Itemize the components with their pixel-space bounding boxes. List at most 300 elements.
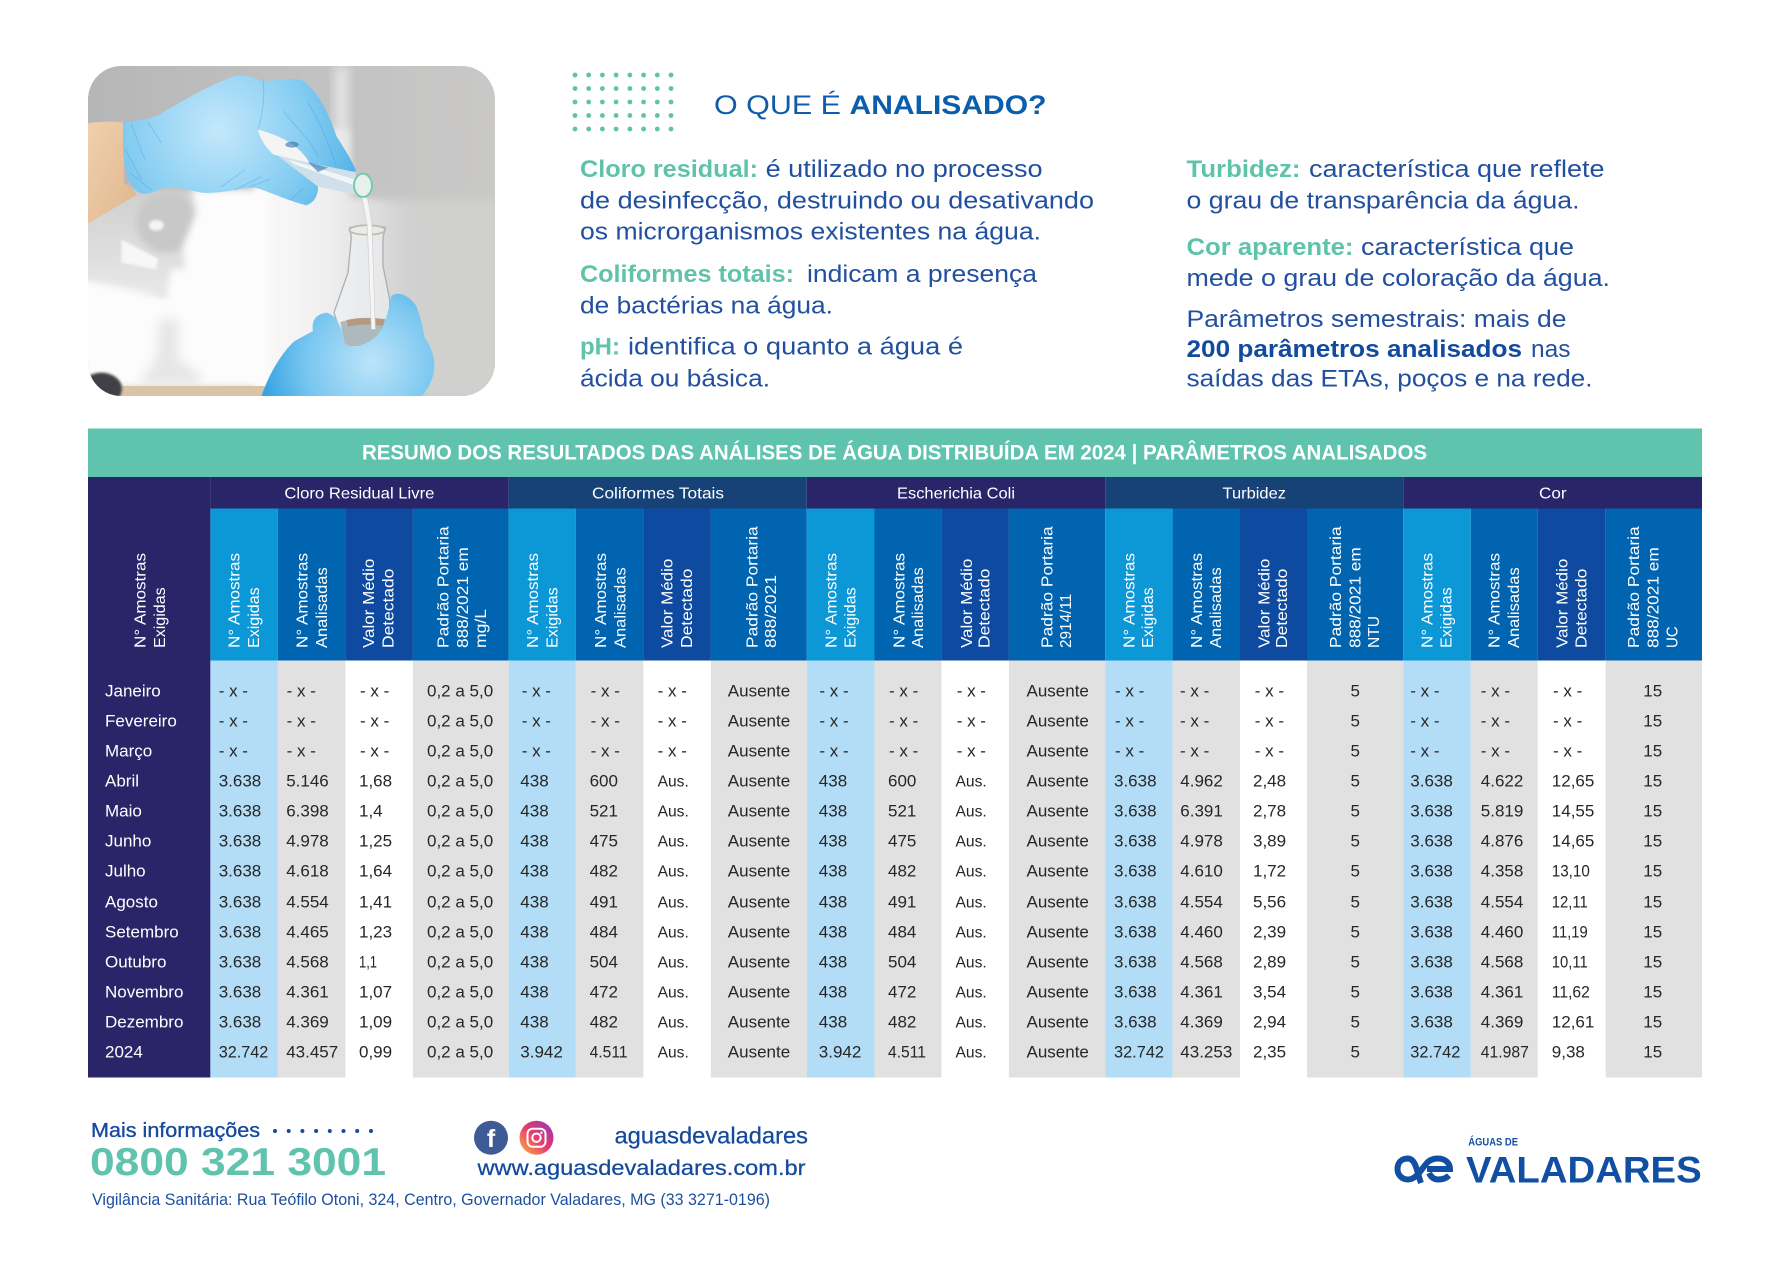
row: Julho: 438	[819, 862, 847, 880]
row: Março: - x -	[591, 742, 620, 760]
row: Outubro: 10,11	[1552, 952, 1588, 972]
group header: Turbidez	[1105, 477, 1403, 508]
column headers: Cloro Residual Livre: N° Amostras	[227, 553, 244, 648]
row: Fevereiro: - x -	[219, 712, 248, 730]
row: Outubro: 3.638	[1114, 952, 1157, 972]
row: Dezembro	[219, 1012, 1662, 1032]
row: Maio: 6.391	[1180, 802, 1223, 820]
row: Janeiro: Ausente	[728, 682, 790, 700]
month labels: Novembro	[105, 982, 183, 1002]
row: Março	[219, 742, 1662, 760]
row: Agosto: 15	[1643, 892, 1662, 912]
row: Fevereiro: - x -	[1255, 712, 1284, 730]
column headers: Cor: N° Amostras	[1486, 553, 1504, 648]
row: Fevereiro: - x -	[889, 712, 918, 730]
row: Julho: 13,10	[1552, 862, 1590, 880]
row: Maio: 3.638	[1114, 802, 1157, 820]
row: Agosto: Aus.	[658, 894, 689, 912]
row: 2024 totals: Aus.	[956, 1044, 987, 1062]
table heading band: RESUMO DOS RESULTADOS DAS ANÁLISES DE ÁGUA DISTRIBUÍDA EM 2024 | PARÂMETROS ANALISADOS	[362, 440, 1427, 464]
row: Maio: Ausente	[728, 802, 790, 820]
row: Março: - x -	[957, 742, 986, 760]
photo: gloved hands pouring liquid into a flask	[78, 66, 501, 405]
row: Junho: 4.876	[1481, 832, 1523, 850]
row: Agosto: 5	[1350, 892, 1360, 912]
column headers: Cloro Residual Livre: 888/2021 em	[455, 547, 472, 648]
row: Outubro: 4.568	[1180, 952, 1223, 972]
row: Julho: 438	[520, 862, 549, 880]
row: Novembro: 0,2 a 5,0	[427, 982, 493, 1002]
row: Novembro: Ausente	[728, 982, 790, 1002]
text block: right definitions: característica que reflete	[1309, 156, 1604, 183]
row: 2024 totals: 2,35	[1253, 1042, 1286, 1062]
glove creases	[125, 81, 336, 199]
row: Dezembro: 15	[1643, 1012, 1662, 1032]
row: Fevereiro: - x -	[1410, 712, 1440, 730]
row: Novembro: Ausente	[1026, 982, 1089, 1002]
month labels: Maio	[105, 802, 142, 820]
row: Agosto: 5,56	[1253, 892, 1286, 912]
row: Janeiro: - x -	[591, 682, 620, 700]
row: Fevereiro: - x -	[591, 712, 620, 730]
column headers: Escherichia Coli: N° Amostras	[823, 553, 840, 648]
row: Março: - x -	[1481, 742, 1510, 760]
icon: instagram	[520, 1121, 554, 1155]
row: Maio: Aus.	[658, 804, 689, 820]
row: Agosto: 491	[590, 892, 618, 912]
column headers: Cor: 888/2021 em	[1646, 547, 1662, 648]
row: Dezembro: 3.638	[1410, 1012, 1453, 1032]
column headers: Escherichia Coli: N° Amostras	[891, 553, 908, 648]
row: Julho: 1,72	[1253, 862, 1286, 880]
row: 2024 totals: 4.511	[888, 1042, 926, 1062]
table column backgrounds	[210, 660, 1702, 1078]
row: Julho: 5	[1350, 862, 1360, 880]
row: Março: - x -	[658, 742, 687, 760]
row: Março: 5	[1350, 742, 1360, 760]
row: Maio: Aus.	[956, 804, 987, 820]
title: ANALISADO?	[850, 90, 1046, 120]
column headers: Escherichia Coli: 2914/11	[1058, 594, 1075, 648]
row: Novembro: 472	[590, 982, 618, 1002]
row: Junho: 1,25	[359, 832, 392, 850]
row: Junho: 3,89	[1253, 832, 1286, 850]
row: Abril: 5.146	[286, 772, 329, 790]
row: Março: 15	[1643, 742, 1662, 760]
row: Abril: 5	[1350, 772, 1360, 790]
column headers: Escherichia Coli: Detectado	[976, 569, 994, 648]
first column: months sidebar: N° Amostras	[132, 553, 150, 648]
row: Outubro: 15	[1643, 952, 1662, 972]
row: Janeiro: - x -	[1115, 682, 1144, 700]
text block: right definitions: o grau de transparência da água.	[1186, 188, 1580, 214]
row: Outubro: 3.638	[1410, 952, 1453, 972]
row: Outubro: 2,89	[1253, 952, 1286, 972]
row: Janeiro: 0,2 a 5,0	[427, 682, 493, 700]
column headers: Turbidez: Padrão Portaria	[1328, 526, 1345, 648]
row: 2024 totals: 41.987	[1481, 1042, 1529, 1062]
row: Agosto: 438	[520, 892, 549, 912]
row: Dezembro: Ausente	[1026, 1012, 1089, 1032]
row: Agosto: 491	[888, 892, 916, 912]
row: Janeiro	[219, 682, 1662, 700]
column headers: Cor: Analisadas	[1506, 567, 1523, 648]
row: Abril: 2,48	[1253, 772, 1286, 790]
row: Janeiro: - x -	[1255, 682, 1284, 700]
row: 2024 totals: 32.742	[1114, 1042, 1164, 1062]
row: Abril: 600	[888, 772, 916, 790]
row: Janeiro: - x -	[1481, 682, 1510, 700]
row: Setembro	[219, 922, 1662, 942]
arm	[88, 121, 137, 223]
row: Fevereiro: - x -	[1180, 712, 1209, 730]
column headers: Cloro Residual Livre	[210, 508, 509, 660]
row: Setembro: 3.638	[1410, 922, 1453, 942]
row: Julho: 0,2 a 5,0	[427, 862, 493, 880]
row: Maio: 3.638	[219, 802, 261, 820]
row: Janeiro: 5	[1350, 682, 1360, 700]
row: Dezembro: Ausente	[728, 1012, 790, 1032]
column headers: Turbidez: Exigidas	[1140, 587, 1157, 648]
row: Outubro	[219, 952, 1662, 972]
logo: Águas de Valadares: VALADARES	[1466, 1149, 1702, 1190]
row: Dezembro: 482	[590, 1012, 618, 1032]
text block: right definitions	[1186, 156, 1610, 392]
row: Novembro: 438	[520, 982, 549, 1002]
column headers: Escherichia Coli: Valor Médio	[959, 559, 976, 648]
row: Setembro: 15	[1643, 922, 1662, 942]
logo: Águas de Valadares: ÁGUAS DE	[1468, 1136, 1518, 1148]
row: Maio: 14,55	[1552, 802, 1594, 820]
row: Julho: 3.638	[219, 862, 261, 880]
row: Julho	[219, 862, 1662, 880]
lower glove	[261, 294, 434, 397]
row: Outubro: 0,2 a 5,0	[427, 952, 493, 972]
row: Março: Ausente	[728, 742, 790, 760]
row: Outubro: 438	[819, 952, 847, 972]
row: Outubro: 504	[888, 952, 916, 972]
row: Setembro: 5	[1350, 922, 1360, 942]
title: O QUE É	[714, 90, 841, 120]
row: Julho: 4.618	[286, 862, 329, 880]
row: Outubro: 4.568	[286, 952, 329, 972]
row: Setembro: 484	[590, 922, 618, 942]
row: Janeiro: - x -	[658, 682, 687, 700]
row: Novembro: 4.361	[286, 982, 329, 1002]
decorative dot grid	[573, 73, 673, 131]
row: Dezembro: 3.638	[219, 1012, 261, 1032]
row: 2024 totals: 3.942	[520, 1042, 563, 1062]
row: Novembro: 5	[1350, 982, 1360, 1002]
test tube	[278, 156, 356, 195]
row: 2024 totals: 0,2 a 5,0	[427, 1042, 493, 1062]
row: Agosto: Ausente	[728, 892, 790, 912]
row: Novembro: 15	[1643, 982, 1662, 1002]
row: Janeiro: - x -	[889, 682, 918, 700]
row: Dezembro: Aus.	[956, 1014, 987, 1032]
row: Dezembro: 2,94	[1253, 1012, 1286, 1032]
row: Julho: 482	[888, 862, 916, 880]
column headers: Cloro Residual Livre: Valor Médio	[361, 559, 378, 648]
column headers: Cloro Residual Livre: Padrão Portaria	[436, 526, 452, 648]
month labels: Fevereiro	[105, 712, 177, 730]
row: Novembro: 4.361	[1180, 982, 1223, 1002]
row: Agosto: 12,11	[1552, 892, 1588, 912]
row: Janeiro: Ausente	[1026, 682, 1089, 700]
row: Dezembro: 4.369	[1481, 1012, 1523, 1032]
text block: left definitions: Coliformes totais:	[580, 261, 794, 288]
first column: months sidebar: Exigidas	[152, 587, 169, 648]
month labels: Setembro	[105, 922, 179, 942]
row: Maio: 5	[1350, 802, 1360, 820]
row: Fevereiro: 0,2 a 5,0	[427, 712, 493, 730]
first column: months sidebar	[88, 477, 210, 1078]
text block: right definitions: Cor aparente:	[1186, 234, 1354, 261]
title	[714, 90, 1046, 120]
text block: right definitions: característica que	[1361, 234, 1574, 261]
column headers: Escherichia Coli	[807, 508, 1105, 660]
column headers: Turbidez: N° Amostras	[1121, 553, 1138, 648]
month labels: Abril	[105, 772, 139, 790]
row: Fevereiro	[219, 712, 1662, 730]
row: 2024 totals: Aus.	[658, 1044, 689, 1062]
row: Outubro: 4.568	[1481, 952, 1523, 972]
row: Abril: 12,65	[1552, 772, 1594, 790]
row: 2024 totals: Ausente	[1026, 1042, 1089, 1062]
month labels: Outubro	[105, 952, 166, 972]
group header: Cloro Residual Livre	[210, 477, 509, 508]
row: Agosto: 3.638	[219, 892, 261, 912]
row: Abril: 0,2 a 5,0	[427, 772, 493, 790]
row: Janeiro: - x -	[819, 682, 849, 700]
row: Agosto: 4.554	[1180, 892, 1223, 912]
row: Junho: 4.978	[286, 832, 329, 850]
row: Abril: 600	[590, 772, 618, 790]
row: Agosto: 3.638	[1114, 892, 1157, 912]
stream	[362, 198, 375, 329]
column headers: Cor: Valor Médio	[1554, 559, 1572, 648]
row: Junho: 438	[520, 832, 549, 850]
column headers: Cor: Padrão Portaria	[1626, 526, 1643, 648]
row: Setembro: 2,39	[1253, 922, 1286, 942]
row: Abril: Aus.	[658, 774, 689, 790]
row: Agosto: 3.638	[1410, 892, 1453, 912]
row: Junho: 15	[1643, 832, 1662, 850]
row: Abril: 1,68	[359, 772, 392, 790]
column headers: Escherichia Coli: Padrão Portaria	[1039, 526, 1056, 648]
month labels: Janeiro	[105, 682, 161, 700]
row: Outubro: 504	[590, 952, 618, 972]
row: Junho: 4.978	[1180, 832, 1223, 850]
row: Agosto: 1,41	[359, 892, 392, 912]
column headers: Turbidez: Valor Médio	[1256, 559, 1273, 648]
column headers: Turbidez: Analisadas	[1208, 567, 1225, 648]
row: Outubro: 438	[520, 952, 549, 972]
row: Março: - x -	[360, 742, 389, 760]
row: Setembro: 11,19	[1552, 922, 1588, 942]
column headers: Cor: N° Amostras	[1420, 553, 1437, 648]
address line: Vigilância Sanitária: Rua Teófilo Otoni, 324, Centro, Governador Valadares, MG (33 3271-0196)	[92, 1191, 770, 1209]
text block: left definitions: de bactérias na água.	[580, 292, 833, 320]
month labels: Junho	[105, 832, 151, 850]
row: Outubro: 1,1	[359, 952, 377, 972]
text block: left definitions	[580, 156, 1094, 392]
row: Novembro: 4.361	[1481, 982, 1523, 1002]
row: Agosto: 4.554	[1481, 892, 1523, 912]
row: Setembro: 4.460	[1481, 922, 1523, 942]
month labels	[105, 682, 183, 1062]
row: Julho: 4.610	[1180, 862, 1223, 880]
text block: right definitions: nas	[1531, 336, 1570, 363]
column headers: Cor: Exigidas	[1438, 587, 1455, 648]
column headers: Cor: UC	[1664, 626, 1681, 648]
row: Março: - x -	[287, 742, 316, 760]
month labels: Março	[105, 742, 152, 760]
row: Julho: 1,64	[359, 862, 392, 880]
row: Junho: 3.638	[219, 832, 261, 850]
row: Dezembro: 3.638	[1114, 1012, 1157, 1032]
column headers: Escherichia Coli: Exigidas	[843, 587, 860, 648]
row: Setembro: 3.638	[1114, 922, 1157, 942]
text block: left definitions: os microrganismos existentes na água.	[580, 218, 1041, 246]
text block: right definitions: Parâmetros semestrais: mais de	[1186, 306, 1566, 333]
row: Junho: 3.638	[1410, 832, 1453, 850]
row: Julho: 482	[590, 862, 618, 880]
footer: more information: Mais informações	[91, 1119, 260, 1142]
row: 2024 totals: 43.457	[286, 1042, 338, 1062]
row: Abril: Ausente	[1026, 772, 1089, 790]
row: Junho: Aus.	[956, 834, 987, 850]
row: Maio: 521	[590, 802, 618, 820]
row: Maio: 3.638	[1410, 802, 1453, 820]
row: Junho: 3.638	[1114, 832, 1157, 850]
row: Abril: 438	[520, 772, 549, 790]
row: Dezembro: 12,61	[1552, 1012, 1594, 1032]
row: Janeiro: - x -	[1410, 682, 1440, 700]
row: Julho: Ausente	[1026, 862, 1089, 880]
row: Abril: 3.638	[1114, 772, 1157, 790]
column headers: Coliformes Totais: Analisadas	[612, 567, 629, 648]
row: Julho: 3.638	[1410, 862, 1453, 880]
row: Setembro: 0,2 a 5,0	[427, 922, 493, 942]
row: Setembro: 438	[819, 922, 847, 942]
row: Setembro: 1,23	[359, 922, 392, 942]
column headers: Turbidez	[1105, 508, 1403, 660]
row: Março: - x -	[1115, 742, 1144, 760]
row: Dezembro: 482	[888, 1012, 916, 1032]
row: Agosto: 438	[819, 892, 847, 912]
row: Junho: Aus.	[658, 834, 689, 850]
row: Outubro: Ausente	[1026, 952, 1089, 972]
row: Agosto: 4.554	[286, 892, 329, 912]
row: Janeiro: - x -	[287, 682, 316, 700]
row: Dezembro: 4.369	[1180, 1012, 1223, 1032]
column headers: Coliformes Totais: Detectado	[679, 569, 696, 648]
column headers: Coliformes Totais: Padrão Portaria	[744, 526, 762, 648]
column headers: Coliformes Totais: Exigidas	[544, 587, 561, 648]
text block: left definitions: Cloro residual:	[580, 156, 758, 183]
row: Novembro: 438	[819, 982, 847, 1002]
row: Março: Ausente	[1026, 742, 1089, 760]
row: Julho: 3.638	[1114, 862, 1157, 880]
logo: Águas de Valadares	[1398, 1136, 1702, 1190]
row: Novembro: 1,07	[359, 982, 392, 1002]
text block: left definitions: de desinfecção, destruindo ou desativando	[580, 188, 1094, 214]
row: Fevereiro: Ausente	[1026, 712, 1089, 730]
row: Julho: Aus.	[956, 864, 987, 880]
row: Maio: 521	[888, 802, 916, 820]
row: Novembro: 3.638	[1114, 982, 1157, 1002]
row: Julho: Aus.	[658, 864, 689, 880]
row: Fevereiro: - x -	[658, 712, 687, 730]
row: 2024 totals: Ausente	[728, 1042, 790, 1062]
row: Março: - x -	[219, 742, 248, 760]
row: Janeiro: 15	[1643, 682, 1662, 700]
column headers: Cloro Residual Livre: Analisadas	[314, 567, 331, 648]
row: Junho: 5	[1350, 832, 1360, 850]
row: Abril: 4.962	[1180, 772, 1223, 790]
row: 2024 totals: 9,38	[1552, 1042, 1585, 1062]
month labels: Dezembro	[105, 1012, 183, 1032]
row: 2024 totals: 0,99	[359, 1042, 392, 1062]
row: Abril: Aus.	[956, 774, 987, 790]
row: Junho: 475	[888, 832, 916, 850]
upper glove	[123, 76, 356, 205]
row: Fevereiro: - x -	[522, 712, 551, 730]
social handle: aguasdevaladares	[614, 1122, 808, 1148]
row: Novembro	[219, 982, 1662, 1002]
column headers: Cor	[1403, 508, 1702, 660]
text block: left definitions: é utilizado no processo	[766, 156, 1043, 183]
phone number: 0800 321 3001	[90, 1141, 386, 1184]
row: Julho: 4.358	[1481, 862, 1523, 880]
row: Dezembro: 4.369	[286, 1012, 329, 1032]
row: Julho: Ausente	[728, 862, 790, 880]
row: Setembro: 4.460	[1180, 922, 1223, 942]
row: Agosto: 0,2 a 5,0	[427, 892, 493, 912]
row: Novembro: 3,54	[1253, 982, 1286, 1002]
row: Dezembro: 1,09	[359, 1012, 392, 1032]
text block: left definitions: pH:	[580, 334, 620, 360]
row: Junho: Ausente	[728, 832, 790, 850]
row: Setembro: 4.465	[286, 922, 329, 942]
row: Outubro: Ausente	[728, 952, 790, 972]
row: Junho: Ausente	[1026, 832, 1089, 850]
row: Setembro: 438	[520, 922, 549, 942]
icon: facebook: f	[487, 1125, 496, 1153]
row: Maio: Ausente	[1026, 802, 1089, 820]
column headers: Coliformes Totais: Valor Médio	[660, 559, 677, 648]
column headers: Cor: Detectado	[1573, 569, 1590, 648]
row: Outubro: Aus.	[956, 954, 987, 972]
column headers: Cloro Residual Livre: N° Amostras	[295, 553, 312, 648]
row: Maio: 2,78	[1253, 802, 1286, 820]
column headers: Turbidez: 888/2021 em	[1347, 547, 1364, 648]
row: Janeiro: - x -	[1180, 682, 1209, 700]
column headers: Coliformes Totais: N° Amostras	[525, 553, 542, 648]
row: Maio: 438	[520, 802, 549, 820]
row: Outubro: 3.638	[219, 952, 261, 972]
icon: facebook	[474, 1121, 508, 1155]
row: Março: - x -	[522, 742, 551, 760]
column headers: Cloro Residual Livre: mg/L	[473, 609, 490, 648]
column headers: Coliformes Totais: N° Amostras	[593, 553, 610, 648]
row: Março: - x -	[1410, 742, 1440, 760]
row: 2024 totals	[219, 1042, 1662, 1062]
row: Novembro: 11,62	[1552, 982, 1590, 1002]
text block: right definitions: saídas das ETAs, poços e na rede.	[1186, 366, 1592, 392]
row: Dezembro: 5	[1350, 1012, 1360, 1032]
